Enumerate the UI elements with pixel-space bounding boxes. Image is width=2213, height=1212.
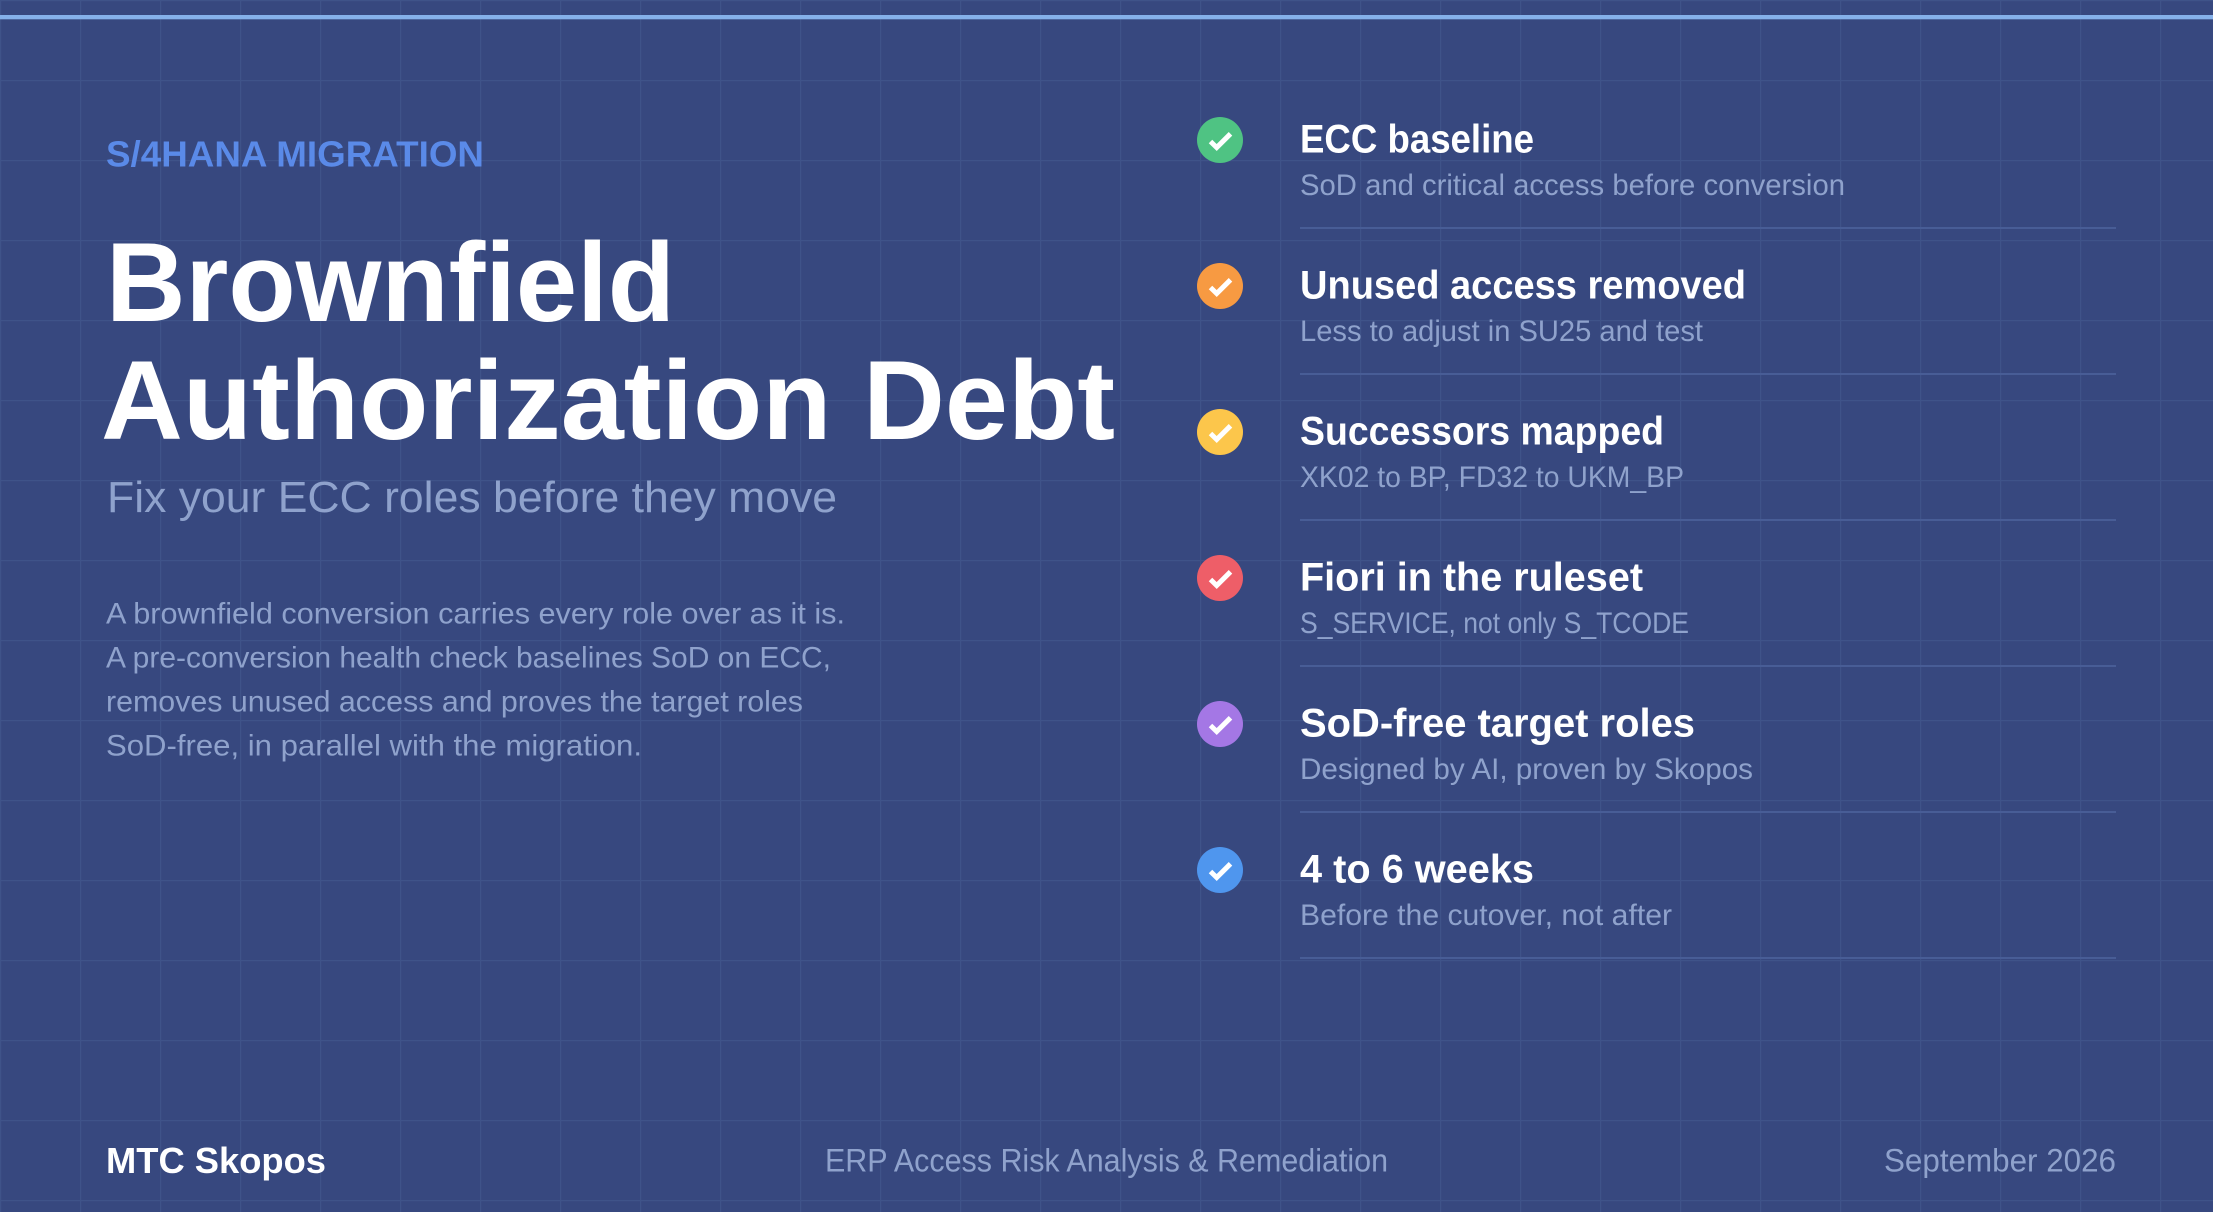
item: Unused access removed	[1197, 263, 2116, 375]
item heading: ECC baseline	[1300, 118, 1534, 162]
brand name: MTC Skopos	[106, 1140, 326, 1181]
icon: red check	[1197, 555, 1243, 601]
intro paragraph: A pre-conversion health check baselines SoD on ECC,	[106, 642, 831, 674]
eyebrow label: S/4HANA MIGRATION	[106, 134, 484, 174]
intro paragraph	[106, 598, 845, 762]
item: ECC baseline	[1197, 117, 2116, 229]
panel: checklist	[1197, 117, 2116, 959]
item description: SoD and critical access before conversion	[1300, 169, 1845, 202]
item description: Less to adjust in SU25 and test	[1300, 315, 1704, 348]
icon: yellow check	[1197, 409, 1243, 455]
item: SoD-free target roles	[1197, 701, 2116, 813]
intro paragraph: A brownfield conversion carries every role over as it is.	[106, 598, 845, 630]
subtitle: Fix your ECC roles before they move	[107, 473, 837, 522]
top accent bar	[0, 15, 2213, 19]
item description: S_SERVICE, not only S_TCODE	[1300, 607, 1689, 640]
intro paragraph: removes unused access and proves the target roles	[106, 686, 803, 718]
footer	[106, 1140, 2116, 1181]
icon: orange check	[1197, 263, 1243, 309]
intro paragraph: SoD-free, in parallel with the migration.	[106, 730, 642, 762]
icon: purple check	[1197, 701, 1243, 747]
title	[101, 220, 1115, 463]
item: 4 to 6 weeks	[1197, 847, 2116, 959]
item description: Before the cutover, not after	[1300, 899, 1672, 932]
footer date: September 2026	[1884, 1142, 2116, 1178]
item heading: SoD-free target roles	[1300, 702, 1695, 746]
title: Authorization Debt	[101, 338, 1115, 463]
item heading: Successors mapped	[1300, 410, 1664, 454]
footer tagline: ERP Access Risk Analysis & Remediation	[825, 1142, 1388, 1178]
icon: green check	[1197, 117, 1243, 163]
item heading: Fiori in the ruleset	[1300, 556, 1643, 600]
item heading: 4 to 6 weeks	[1300, 848, 1534, 892]
title: Brownfield	[106, 220, 675, 345]
item description: XK02 to BP, FD32 to UKM_BP	[1300, 461, 1684, 494]
icon: blue check	[1197, 847, 1243, 893]
item: Successors mapped	[1197, 409, 2116, 521]
item description: Designed by AI, proven by Skopos	[1300, 753, 1753, 786]
panel: left intro	[101, 134, 1115, 762]
item: Fiori in the ruleset	[1197, 555, 2116, 667]
item heading: Unused access removed	[1300, 264, 1746, 308]
